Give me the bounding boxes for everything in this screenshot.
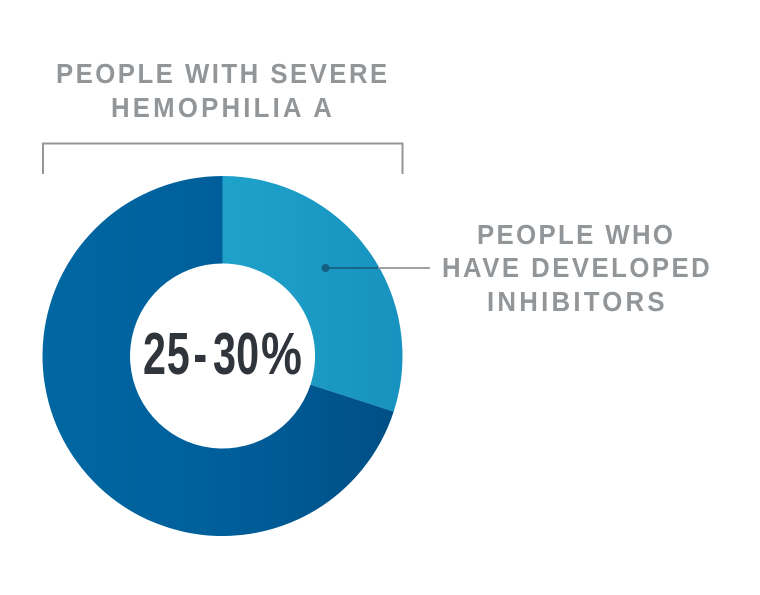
heading: people with severe hemophilia A: PEOPLE WITH SEVERE (56, 58, 387, 89)
heading: people with severe hemophilia A (56, 58, 387, 123)
callout leader line (322, 264, 430, 272)
center value: % (261, 322, 302, 387)
slice: people who have developed inhibitors (222, 176, 403, 412)
slice: remaining people (43, 176, 394, 536)
callout label: people who have developed inhibitors: HAVE DEVELOPED (442, 252, 710, 283)
callout label: people who have developed inhibitors: INHIBITORS (487, 286, 665, 317)
center value: 25-30 (143, 321, 259, 387)
callout label: people who have developed inhibitors (442, 219, 710, 317)
heading: people with severe hemophilia A: HEMOPHILIA A (111, 92, 332, 123)
donut chart (43, 176, 403, 536)
bracket (43, 144, 402, 174)
callout label: people who have developed inhibitors: PEOPLE WHO (477, 219, 673, 250)
